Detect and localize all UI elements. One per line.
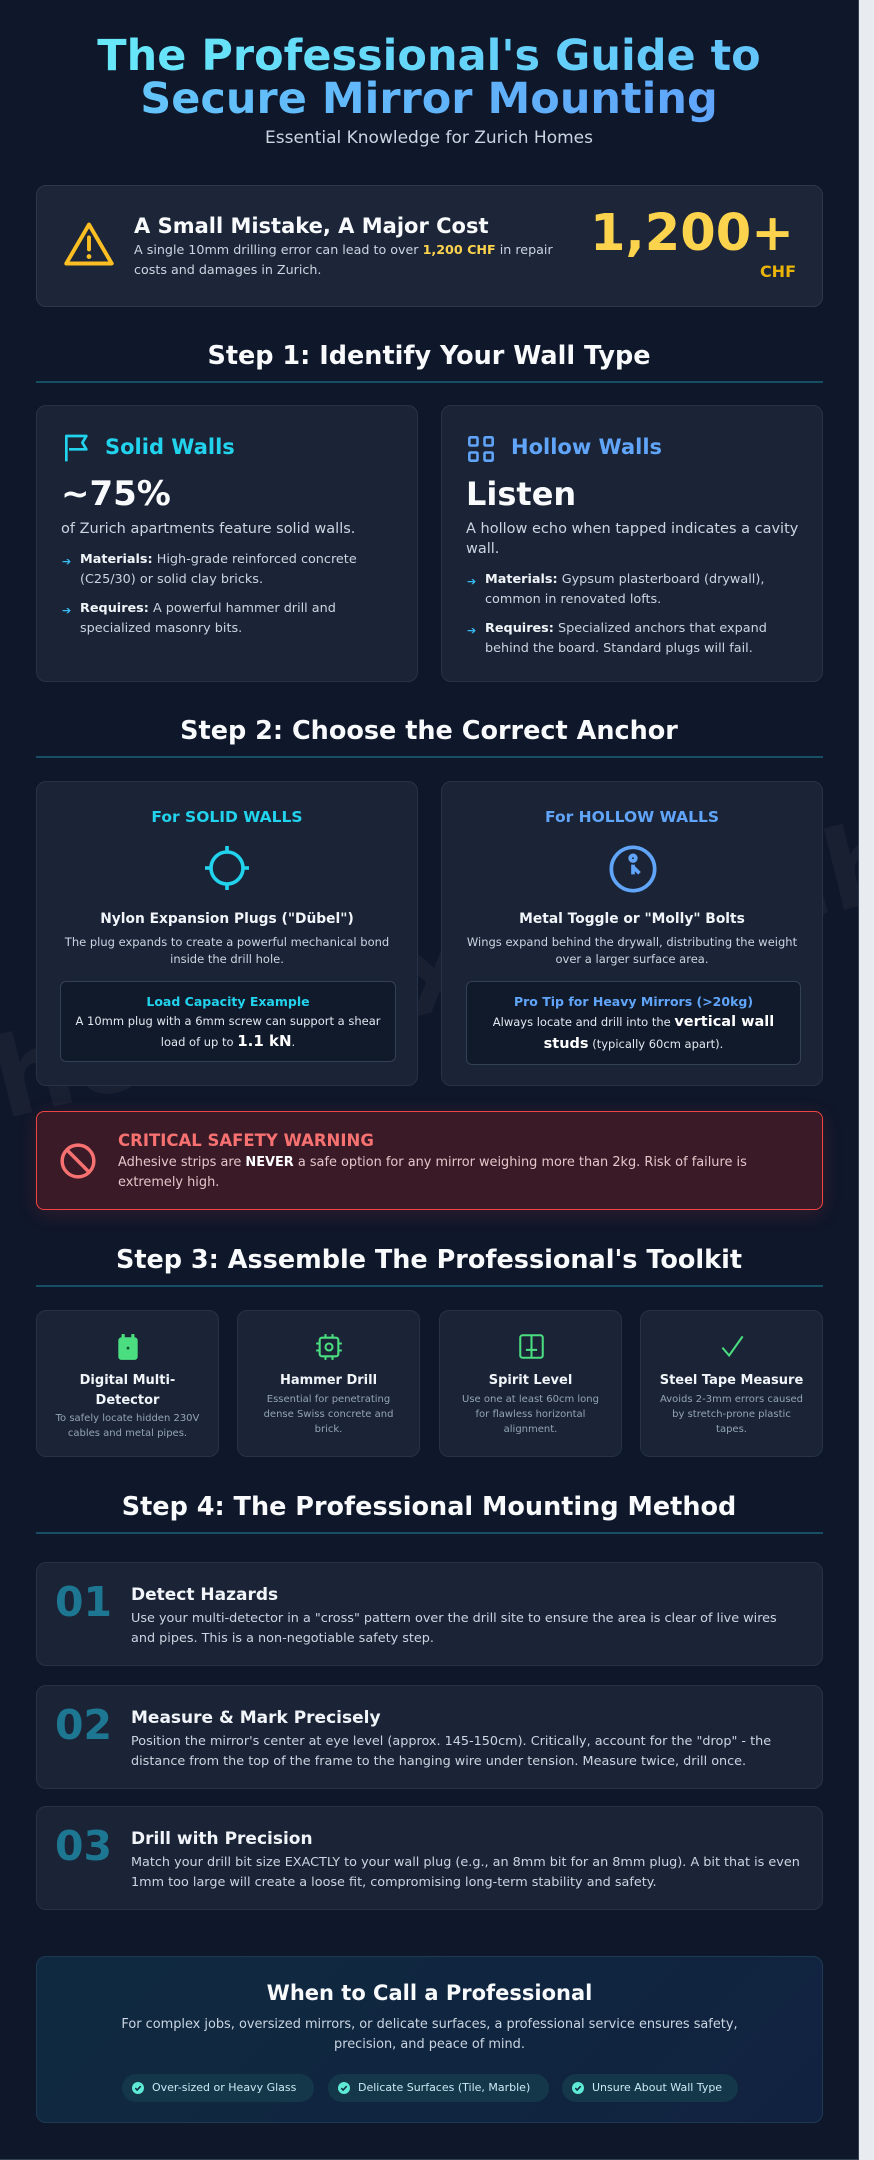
callout: pro tip: studs (typically 60cm apart). — [544, 1036, 723, 1052]
bullets: ➔ — [467, 575, 476, 588]
panel: hollow anchor: For HOLLOW WALLS — [545, 808, 719, 826]
title: The Professional's Guide to — [97, 31, 761, 81]
panel: tool spirit level: for flawless horizontal — [476, 1409, 585, 1420]
text: costs and damages in Zurich. — [134, 262, 321, 277]
icon: detector — [118, 1334, 138, 1360]
icon: prohibited — [60, 1143, 96, 1179]
panel: tool hammer drill: Essential for penetrating — [267, 1394, 390, 1405]
subtitle: Essential Knowledge for Zurich Homes — [265, 128, 593, 148]
bullets: (C25/30) or solid clay bricks. — [80, 572, 263, 587]
panel: step 02: Position the mirror's center at eye level (approx. 145-150cm). Critically, account for the "drop" - the — [131, 1734, 771, 1749]
panel: solid anchor: The plug expands to create a powerful mechanical bond — [65, 935, 389, 949]
bullets — [62, 552, 357, 587]
panel: step 01: Use your multi-detector in a "cross" pattern over the drill site to ensure the area is clear of live wires — [131, 1611, 777, 1626]
panel: hollow walls — [441, 405, 823, 682]
panel: tool spirit level: alignment. — [504, 1424, 557, 1435]
panel: step 02: 02 — [55, 1701, 112, 1749]
panel: step 03: 1mm too large will create a loose fit, compromising long-term stability and safety. — [131, 1875, 657, 1890]
pill: heavy glass: Over-sized or Heavy Glass — [152, 2081, 296, 2094]
panel: cost callout: CHF — [760, 262, 796, 281]
panel: tool detector: Detector — [96, 1393, 159, 1408]
panel: call a professional: For complex jobs, oversized mirrors, or delicate surfaces, a professional service ensures safety, — [121, 2017, 738, 2032]
callout: pro tip: Pro Tip for Heavy Mirrors (>20kg) — [514, 994, 753, 1009]
panel: call a professional: precision, and peace of mind. — [334, 2037, 525, 2052]
panel: step 02: Measure & Mark Precisely — [131, 1708, 381, 1728]
panel: hollow walls: behind the board. Standard plugs will fail. — [485, 641, 753, 656]
heading: A Small Mistake, A Major Cost — [134, 214, 488, 238]
panel: tool hammer drill: brick. — [315, 1424, 342, 1435]
callout: safety warning: CRITICAL SAFETY WARNING — [118, 1131, 374, 1150]
panel: hollow anchor: over a larger surface area. — [556, 952, 708, 966]
panel: hollow anchor — [441, 781, 823, 1086]
panel: tool tape measure: tapes. — [716, 1424, 747, 1435]
title — [97, 31, 761, 124]
panel: hollow anchor: Wings expand behind the drywall, distributing the weight — [467, 935, 797, 949]
panel: solid anchor: Nylon Expansion Plugs ("Dübel") — [100, 911, 354, 927]
panel: tool tape measure: by stretch-prone plastic — [672, 1409, 791, 1420]
stat: ~75% — [61, 474, 171, 514]
bullets: common in renovated lofts. — [485, 592, 661, 607]
callout: load capacity: load of up to 1.1 kN. — [161, 1032, 295, 1050]
panel: tool hammer drill: Hammer Drill — [280, 1373, 377, 1388]
panel: tool spirit level — [439, 1310, 622, 1457]
heading: Solid Walls — [105, 435, 235, 459]
panel: tool detector: cables and metal pipes. — [68, 1428, 187, 1439]
heading: step 2: Step 2: Choose the Correct Anchor — [180, 716, 678, 746]
icon: crosshair — [205, 846, 249, 890]
heading: Hollow Walls — [511, 435, 662, 459]
icon: level — [519, 1334, 544, 1359]
panel: hollow walls: A hollow echo when tapped indicates a cavity — [466, 521, 798, 537]
panel: step 02 — [36, 1685, 823, 1789]
bullets: ➔ — [62, 555, 71, 568]
panel: step 01: and pipes. This is a non-negotiable safety step. — [131, 1631, 434, 1646]
pill: wall type — [562, 2074, 738, 2102]
panel: step 03 — [36, 1806, 823, 1910]
panel: solid anchor: For SOLID WALLS — [151, 808, 303, 826]
icon: grid — [468, 436, 494, 462]
panel: cost callout — [36, 185, 823, 307]
icon: chip — [316, 1334, 342, 1360]
panel: step 01: 01 — [55, 1578, 112, 1626]
panel: tool spirit level: Use one at least 60cm long — [462, 1394, 599, 1405]
panel: solid walls: of Zurich apartments feature solid walls. — [61, 521, 355, 537]
panel: tool tape measure — [640, 1310, 823, 1457]
icon: check — [722, 1336, 744, 1358]
text — [134, 242, 553, 277]
panel: hollow walls: ➔ — [467, 624, 476, 637]
callout: safety warning: extremely high. — [118, 1175, 219, 1190]
panel: step 02: distance from the top of the frame to the hanging wire under tension. Measure twice, drill once. — [131, 1754, 746, 1769]
panel: hollow walls: Requires: Specialized anchors that expand — [485, 621, 767, 636]
panel: solid walls: specialized masonry bits. — [80, 621, 242, 636]
callout: load capacity: Load Capacity Example — [146, 994, 310, 1009]
panel: step 01: Detect Hazards — [131, 1585, 278, 1605]
callout: pro tip — [466, 981, 801, 1065]
title: Secure Mirror Mounting — [140, 74, 718, 124]
panel: tool tape measure: Avoids 2-3mm errors caused — [660, 1394, 803, 1405]
panel: tool hammer drill — [237, 1310, 420, 1457]
bullets: Materials: High-grade reinforced concrete — [80, 552, 357, 567]
panel: tool detector: To safely locate hidden 230V — [56, 1413, 199, 1424]
panel: tool tape measure: Steel Tape Measure — [660, 1373, 803, 1388]
callout: pro tip: Always locate and drill into the vertical wall — [493, 1014, 774, 1030]
panel: hollow walls: Listen — [466, 475, 576, 513]
icon: flag — [65, 434, 88, 462]
panel: hollow anchor: Metal Toggle or "Molly" Bolts — [519, 911, 745, 927]
bullets: Materials: Gypsum plasterboard (drywall), — [485, 572, 764, 587]
panel: solid walls — [36, 405, 418, 682]
panel: tool detector: Digital Multi- — [80, 1373, 175, 1388]
pill: delicate surfaces: Delicate Surfaces (Tile, Marble) — [358, 2081, 530, 2094]
text: A single 10mm drilling error can lead to over 1,200 CHF in repair — [134, 242, 553, 257]
panel: solid anchor — [36, 781, 418, 1086]
panel: call a professional — [36, 1956, 823, 2123]
panel: step 03: 03 — [55, 1822, 112, 1870]
panel: call a professional: When to Call a Professional — [267, 1981, 592, 2005]
icon: warning triangle — [64, 222, 114, 266]
bullets — [467, 572, 764, 607]
panel: solid anchor: inside the drill hole. — [170, 952, 284, 966]
heading: step 4: Step 4: The Professional Mounting Method — [122, 1492, 736, 1522]
callout: safety warning — [36, 1111, 823, 1210]
panel: solid walls: ➔ — [62, 604, 71, 617]
icon: toggle bolt — [610, 846, 656, 892]
callout: load capacity: A 10mm plug with a 6mm screw can support a shear — [76, 1014, 380, 1028]
pill: wall type: Unsure About Wall Type — [592, 2081, 722, 2094]
big number: 1,200+ — [590, 204, 794, 263]
panel: tool spirit level: Spirit Level — [489, 1373, 572, 1388]
panel: hollow walls: wall. — [466, 541, 499, 557]
callout: load capacity — [60, 981, 396, 1062]
callout: safety warning: Adhesive strips are NEVER a safe option for any mirror weighing more than 2kg. Risk of failure is — [118, 1155, 747, 1170]
panel: tool detector — [36, 1310, 219, 1457]
panel: solid walls: Requires: A powerful hammer drill and — [80, 601, 336, 616]
panel: step 03: Match your drill bit size EXACTLY to your wall plug (e.g., an 8mm bit for an 8mm plug). A bit that is even — [131, 1855, 800, 1870]
panel: tool hammer drill: dense Swiss concrete and — [264, 1409, 393, 1420]
panel: step 01 — [36, 1562, 823, 1666]
heading: step 3: Step 3: Assemble The Professional's Toolkit — [116, 1245, 742, 1275]
pill: heavy glass — [122, 2074, 314, 2102]
heading: step 1: Step 1: Identify Your Wall Type — [207, 341, 651, 371]
panel: step 03: Drill with Precision — [131, 1829, 313, 1849]
pill: delicate surfaces — [328, 2074, 549, 2102]
